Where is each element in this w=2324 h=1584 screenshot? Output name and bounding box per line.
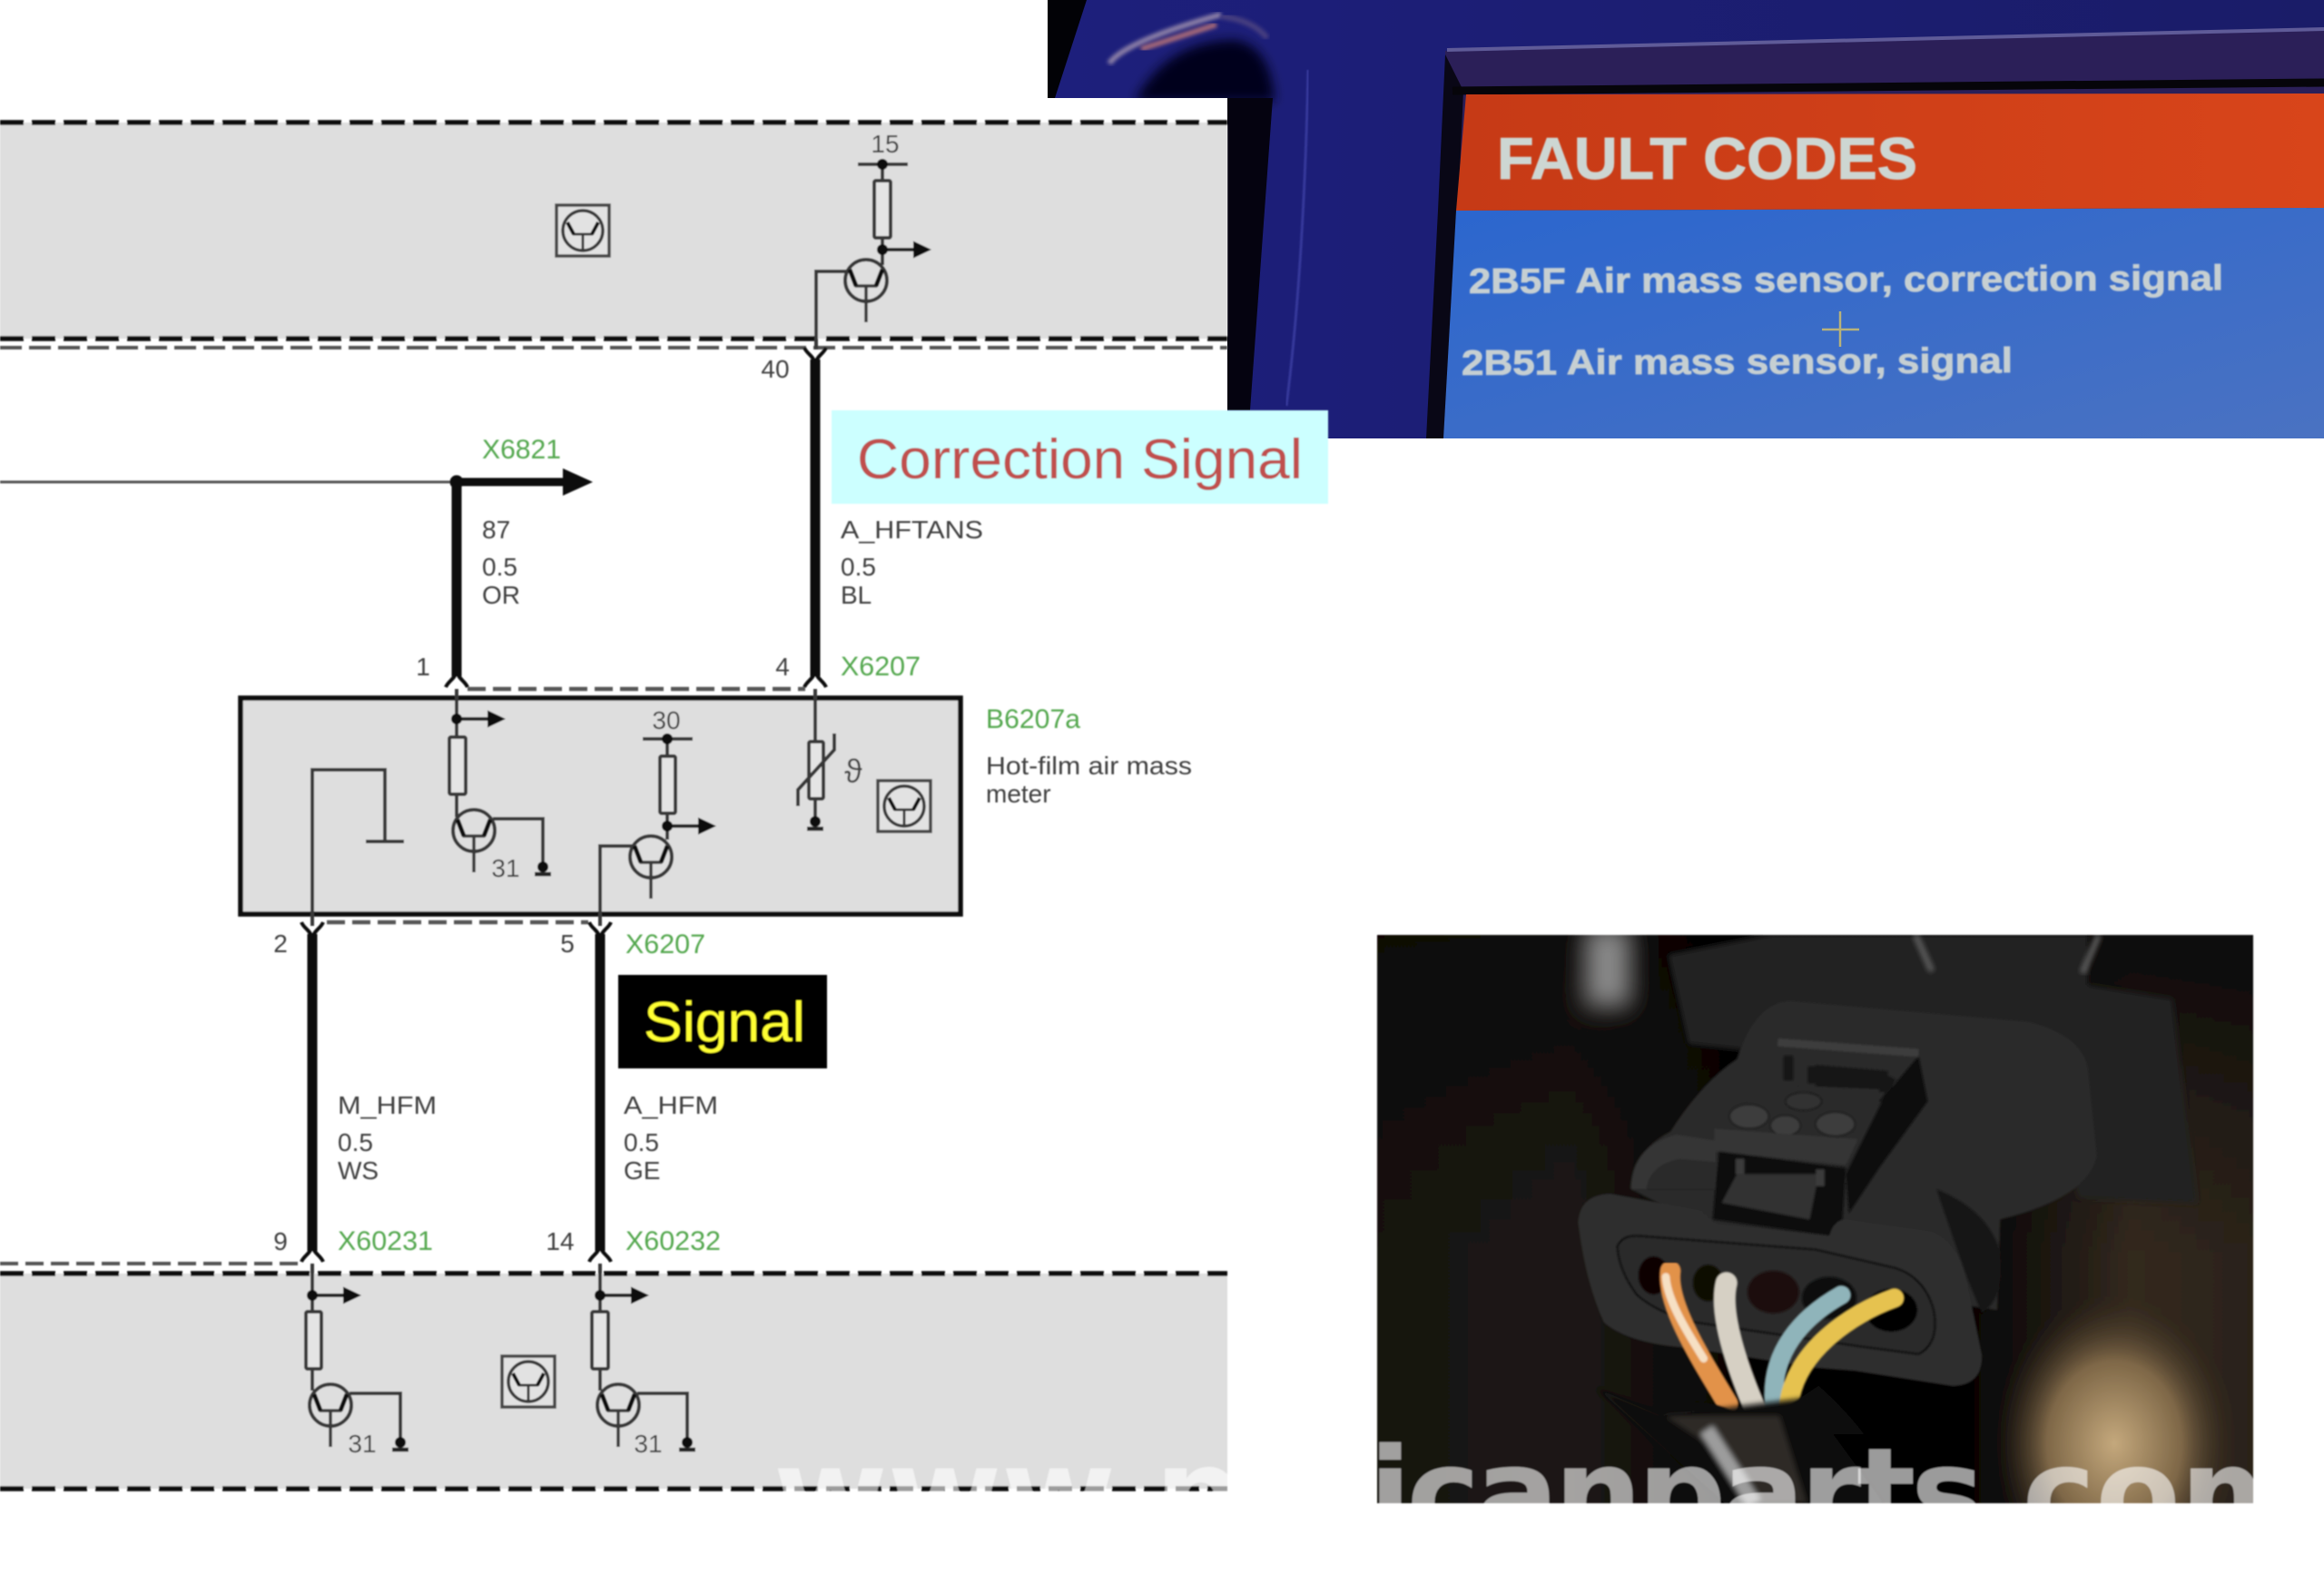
connector body [1629,1046,2078,1311]
connector pin holes [1639,1256,1917,1332]
wire: ground M_HFM [301,922,323,1262]
thermistor [798,689,862,829]
label: pin 9: 9 [273,1227,288,1255]
coloured wires [1666,1271,1895,1416]
label: terminal 15: 15 [871,130,900,158]
label: pin 14: 14 [546,1227,575,1255]
label: B6207a: B6207a [986,704,1080,734]
label: terminal 31: 31 [348,1430,377,1458]
wire label: A_HFM 0.5 GE: GE [624,1156,660,1185]
text: hot-film air mass meter [986,752,1192,808]
wire label: A_HFTANS 0.5 BL: A_HFTANS [841,516,983,544]
left driver circuit [306,1264,409,1458]
right transistor circuit [600,706,716,926]
wire label: A_HFM 0.5 GE: A_HFM [624,1091,718,1119]
label: connector X6207 lower: X6207 [625,930,705,959]
right driver circuit [592,1264,695,1458]
connector dashes [327,689,805,922]
label: connector X60232: X60232 [625,1226,721,1256]
label: terminal 31: 31 [491,854,520,882]
connector face [1578,1194,1982,1386]
wire label: A_HFTANS 0.5 BL: 0.5 [841,553,876,581]
text: hot-film air mass meter: meter [986,780,1051,808]
ground stub circuit [312,770,404,926]
rear housing plate [1669,935,2197,1203]
label: terminal 30: 30 [652,706,681,734]
wire label: M_HFM 0.5 WS [338,1091,437,1185]
wire label: A_HFM 0.5 GE [624,1091,718,1185]
callout: signal [618,975,827,1068]
callout: correction signal: Correction Signal [857,428,1303,491]
wire: signal A_HFM [589,922,611,1262]
wire label: A_HFTANS 0.5 BL [841,516,983,609]
icon: electronic unit symbol [556,205,609,256]
wire label: 87 0.5 OR: 0.5 [482,553,517,581]
red screen header [1456,93,2324,211]
photo: air mass meter connector with coloured wires [1376,933,2255,1505]
label: connector X6207 upper: X6207 [841,652,921,682]
callout: correction signal [832,410,1328,504]
watermark: www.pelicanparts.com: www.pelicanparts.com [773,1422,2309,1566]
wire label: M_HFM 0.5 WS: 0.5 [338,1128,373,1156]
label: pin 2: 2 [273,930,288,958]
connector latch [1631,1042,1927,1237]
icon: electronic unit symbol [502,1356,555,1407]
label: terminal 31: 31 [634,1430,663,1458]
label: pin 1: 1 [416,653,430,681]
collar shadow [1936,1189,2002,1313]
wire label: M_HFM 0.5 WS: M_HFM [338,1091,437,1119]
header text: fault codes: FAULT CODES [1497,125,1917,192]
wire: correction signal pin 40 to pin 4 [804,348,826,687]
fault code line 2: 2B51 Air mass sensor, signal [1462,341,2013,383]
fault code line 1: 2B5F Air mass sensor, correction signal [1469,259,2223,301]
cable sheath [1659,1386,1864,1434]
wire label: M_HFM 0.5 WS: WS [338,1156,379,1185]
callout: signal: Signal [644,991,805,1054]
wire label: 87 0.5 OR: OR [482,581,520,609]
wire label: 87 0.5 OR: 87 [482,516,510,544]
wire label: A_HFTANS 0.5 BL: BL [841,581,872,609]
label: pin 5: 5 [560,930,575,958]
label: pin 4: 4 [775,653,790,681]
label: connector X6821: X6821 [482,435,561,465]
left transistor circuit [449,689,551,882]
photo: diagnostic scan tool showing fault codes [1048,0,2324,438]
background highlights [1562,934,2221,1504]
panel: top control unit band [0,123,1227,349]
top transistor circuit [816,159,931,349]
feed line and output arrow X6821 [0,468,593,496]
label: connector X60231: X60231 [338,1226,433,1256]
panel: bottom control unit band [0,1264,1227,1489]
wire label: A_HFM 0.5 GE: 0.5 [624,1128,659,1156]
wire label: 87 0.5 OR [482,516,520,609]
plus sign between codes [1822,311,1859,347]
blue screen with fault code list [1443,208,2324,438]
white backing of wiring diagram [0,98,1227,438]
text: hot-film air mass meter: Hot-film air mass [986,752,1192,780]
cable below connector [1598,1389,1884,1503]
label: pin 40: 40 [761,355,790,383]
wire: pin 87 to pin 1 [446,482,468,687]
panel: hot-film air mass meter module [241,689,960,926]
symbol: theta: ϑ [844,753,862,790]
icon: electronic unit symbol [878,781,931,831]
